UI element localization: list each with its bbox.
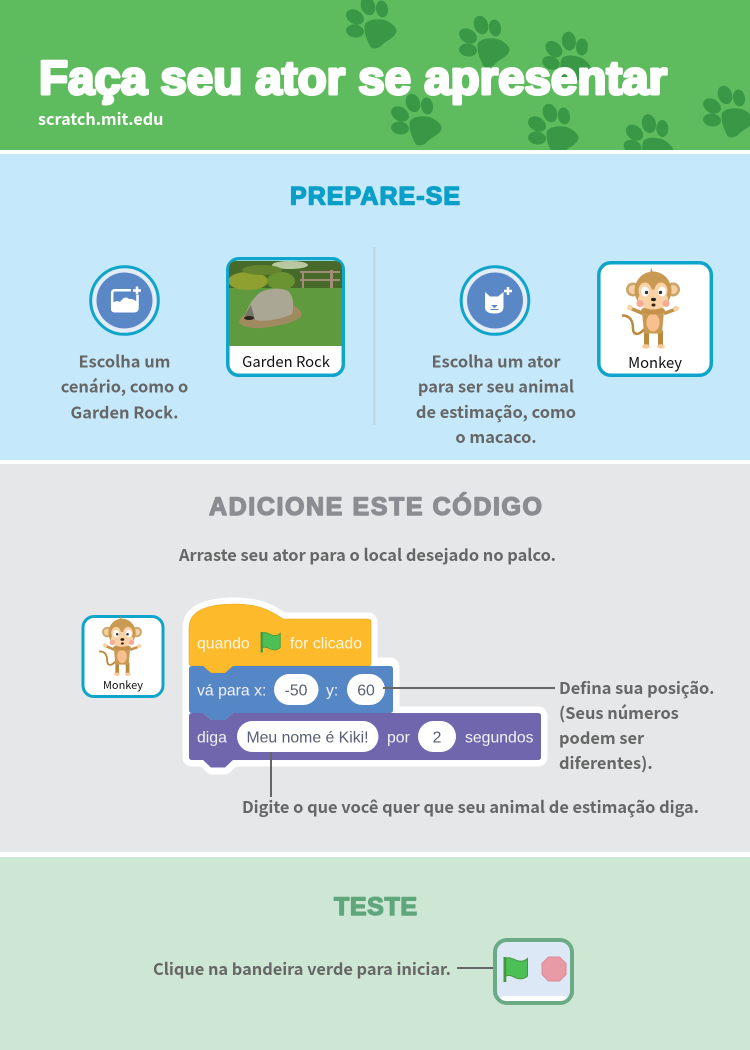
white block outline: [189, 604, 541, 768]
instruction: Arraste seu ator para o local desejado no palco.: [178, 542, 556, 566]
callout: position: [559, 675, 714, 774]
card: Garden Rock: [228, 259, 343, 375]
heading: test: TESTE: [334, 893, 417, 921]
block: go to x y: y:: [326, 682, 338, 700]
icon: choose sprite: [461, 267, 529, 334]
text: choose backdrop: cenário, como o: [61, 374, 188, 398]
block: say for seconds: diga: [197, 730, 227, 746]
url: scratch.mit.edu: [38, 106, 163, 130]
text: choose sprite: para ser seu animal: [418, 374, 574, 398]
icon: green flag: [504, 957, 528, 982]
text: choose sprite: Escolha um ator: [432, 348, 561, 372]
header banner: [0, 0, 750, 150]
block: say for seconds: 2: [433, 730, 441, 746]
block: say for seconds: [189, 713, 541, 768]
block: say for seconds: Meu nome é Kiki!: [246, 730, 369, 746]
text: choose sprite: de estimação, como: [416, 399, 576, 423]
stage controls: [495, 940, 572, 1003]
heading: add code: ADICIONE ESTE CÓDIGO: [209, 491, 542, 521]
block: when flag clicked: [189, 604, 371, 673]
text: choose backdrop: Garden Rock.: [71, 400, 178, 424]
callout: position: (Seus números: [559, 700, 679, 724]
card: small monkey: Monkey: [103, 677, 143, 693]
block: go to x y: vá para x:: [197, 682, 266, 700]
heading: prepare: PREPARE-SE: [290, 182, 460, 210]
panel: test: [0, 857, 750, 1050]
paw print pattern: [346, 0, 750, 150]
block: say for seconds: por: [387, 730, 410, 746]
text: choose sprite: [416, 348, 576, 448]
block: say for seconds: segundos: [465, 730, 534, 746]
icon: stop sign: [542, 957, 566, 981]
card: Monkey: Monkey: [628, 352, 682, 373]
text: choose sprite: o macaco.: [455, 424, 537, 448]
block: when flag clicked: for clicado: [290, 636, 362, 652]
icon: choose backdrop: [91, 267, 158, 334]
block: when flag clicked: quando: [197, 636, 250, 652]
card: Garden Rock: Garden Rock: [242, 351, 331, 372]
card: small monkey: [83, 616, 163, 696]
backdrop photo: [228, 261, 342, 346]
block: go to x y: [189, 666, 393, 720]
callout: position: diferentes).: [559, 750, 653, 774]
block: go to x y: 60: [357, 682, 375, 700]
callout: position: podem ser: [559, 725, 645, 749]
panel: add code: [0, 464, 750, 852]
panel: prepare: [0, 154, 750, 460]
callout: position: Defina sua posição.: [559, 675, 714, 699]
block: go to x y: -50: [285, 682, 308, 700]
card: Monkey: [599, 263, 711, 375]
title: Faça seu ator se apresentar: [39, 51, 667, 104]
code blocks: [189, 604, 541, 768]
arrow: position line: [383, 687, 555, 689]
text: choose backdrop: Escolha um: [79, 348, 170, 372]
arrow: say line: [270, 752, 272, 797]
instruction: click flag: Clique na bandeira verde para iniciar.: [153, 956, 451, 980]
text: choose backdrop: [61, 348, 188, 424]
callout: say: Digite o que você quer que seu animal de estimação diga.: [242, 794, 699, 818]
arrow: to flag: [457, 967, 500, 969]
